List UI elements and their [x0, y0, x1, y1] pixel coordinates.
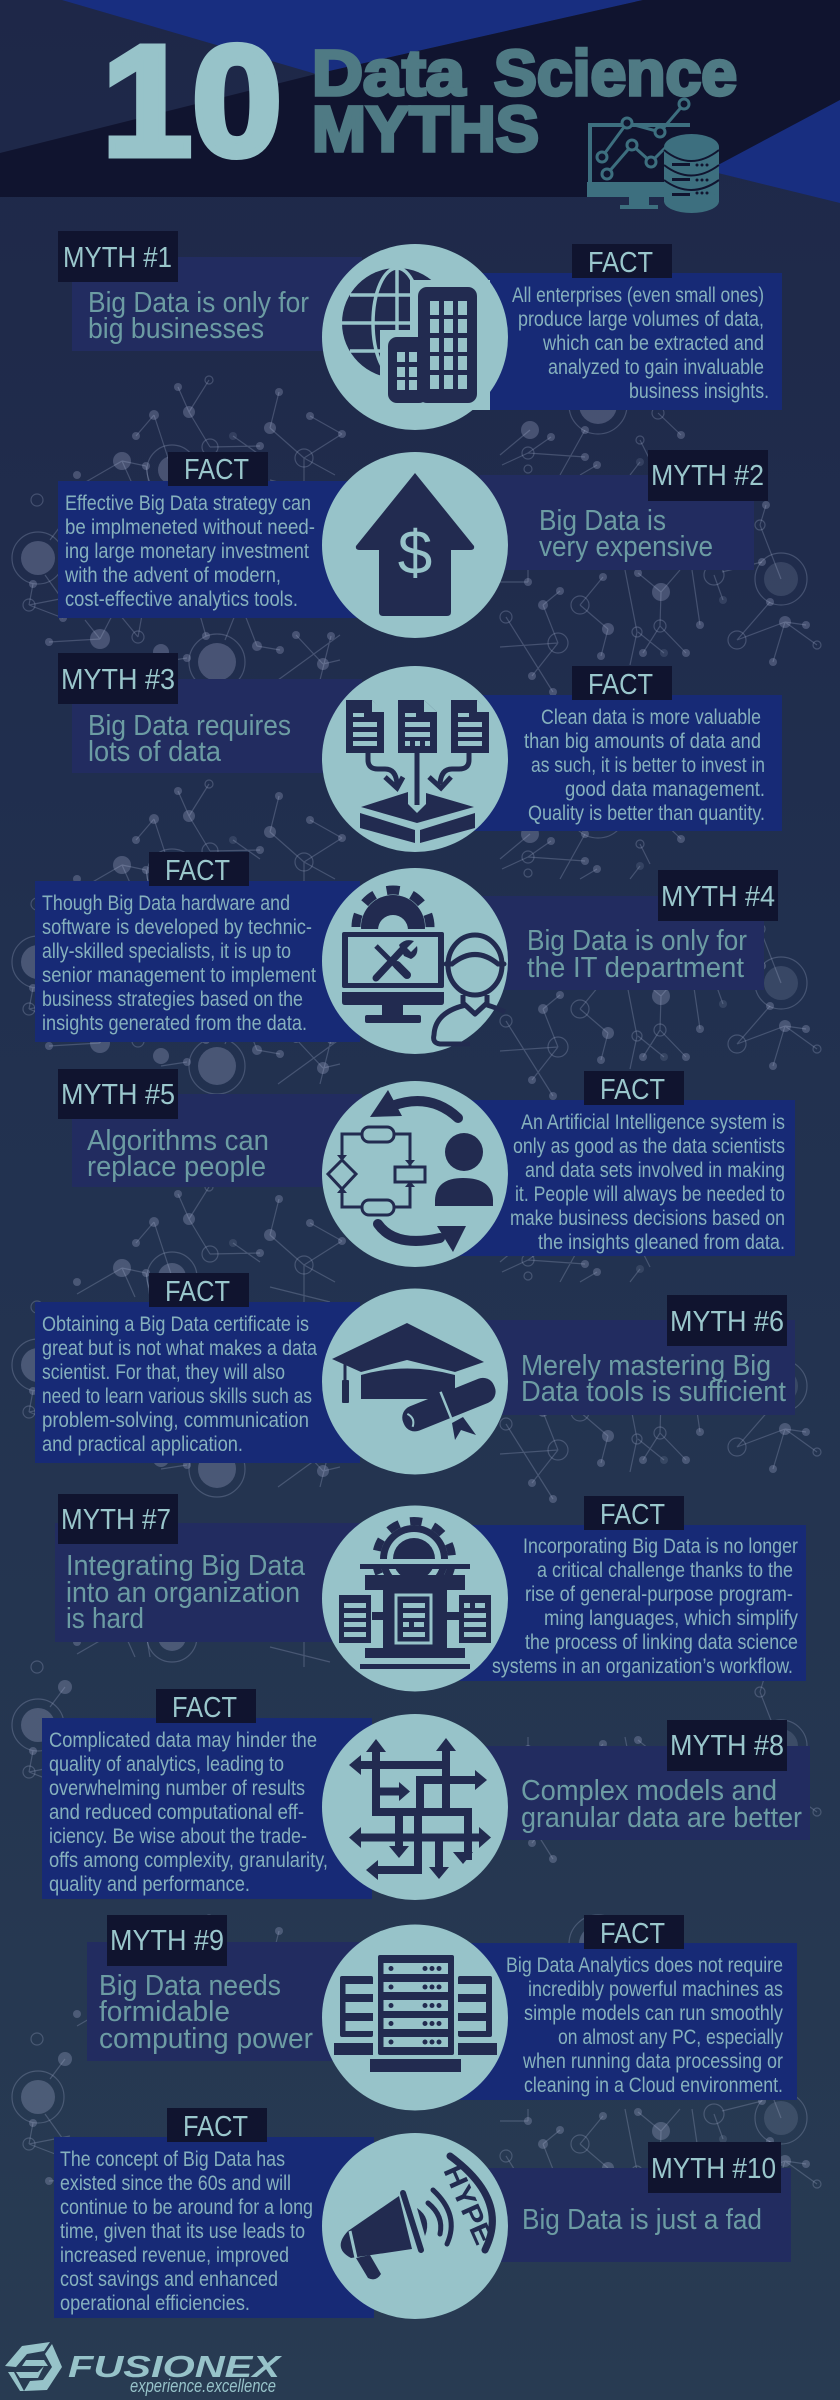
- circle 9: [322, 1924, 508, 2110]
- fact 4 panel: business strategies based on the: [42, 988, 303, 1011]
- fact 10 label: FACT: [183, 2111, 248, 2143]
- fact 9 panel: [460, 1943, 797, 2100]
- myth 2 panel: very expensive: [539, 531, 713, 563]
- icon: dollar arrow: [356, 473, 474, 616]
- myth 3 panel: [72, 679, 362, 773]
- myth 7 panel: is hard: [66, 1603, 144, 1635]
- header banner shapes: [0, 0, 840, 203]
- circle 2: [322, 452, 508, 638]
- background network pattern: [12, 376, 821, 2235]
- circle 4: [322, 868, 508, 1054]
- myth 7 label: MYTH #7: [61, 1504, 171, 1536]
- fact 1 panel: All enterprises (even small ones): [512, 284, 764, 307]
- fact 8 panel: and reduced computational eff-: [49, 1801, 304, 1824]
- myth 10 label: MYTH #10: [651, 2153, 776, 2185]
- icon: megaphone with HYPE: [341, 2156, 499, 2279]
- fact 8 panel: offs among complexity, granularity,: [49, 1849, 328, 1872]
- myth 7 panel: [55, 1523, 360, 1642]
- fact 2 panel: ing large monetary investment: [65, 540, 309, 563]
- fact 5 panel: make business decisions based on: [510, 1207, 785, 1230]
- myth 4 panel: the IT department: [527, 952, 744, 984]
- icon: globe and buildings: [342, 268, 490, 410]
- fact 4 label: [149, 852, 249, 887]
- logo: Fusionex: [5, 2342, 283, 2396]
- myth 8 label: MYTH #8: [670, 1730, 784, 1762]
- fact 9 panel: Big Data Analytics does not require: [506, 1954, 783, 1977]
- fact 9 panel: simple models can run smoothly: [524, 2002, 783, 2025]
- myth 9 panel: computing power: [99, 2023, 313, 2055]
- myth 8 label: [667, 1720, 787, 1771]
- myth 1 label: [58, 231, 178, 282]
- fact 2 panel: Effective Big Data strategy can: [65, 492, 311, 515]
- circle 8: [322, 1714, 508, 1900]
- fact 7 panel: a critical challenge thanks to the: [537, 1559, 793, 1582]
- fact 3 label: FACT: [588, 669, 653, 701]
- logo wordmark: FUSIONEX: [68, 2349, 283, 2384]
- fact 6 label: FACT: [165, 1276, 230, 1308]
- section: myth 5: [58, 1069, 795, 1267]
- fact 4 panel: insights generated from the data.: [42, 1012, 307, 1035]
- myth 9 panel: [87, 1942, 362, 2061]
- icon: gear, monitor and technician: [342, 890, 505, 1044]
- fact 8 panel: quality and performance.: [49, 1873, 250, 1896]
- fact 3 panel: Quality is better than quantity.: [528, 802, 765, 825]
- myth 2 panel: Big Data is: [539, 505, 666, 537]
- myth 10 panel: Big Data is just a fad: [522, 2204, 762, 2236]
- fact 6 panel: and practical application.: [42, 1433, 243, 1456]
- fact 6 panel: problem-solving, communication: [42, 1409, 309, 1432]
- circle 6: [322, 1288, 508, 1474]
- myth 6 panel: Merely mastering Big: [521, 1350, 771, 1382]
- fact 4 panel: ally-skilled specialists, it is up to: [42, 940, 291, 963]
- icon: monitor chart and database: [587, 99, 719, 213]
- logo tagline: experience.excellence: [130, 2376, 276, 2396]
- myth 1 label: MYTH #1: [63, 242, 172, 274]
- fact 2 label: [168, 452, 268, 486]
- fact 5 panel: An Artificial Intelligence system is: [521, 1111, 785, 1134]
- myth 3 label: MYTH #3: [61, 664, 175, 696]
- myth 7 panel: Integrating Big Data: [66, 1550, 306, 1582]
- fact 3 panel: good data management.: [565, 778, 765, 801]
- fact 6 panel: need to learn various skills such as: [42, 1385, 312, 1408]
- fact 9 panel: incredibly powerful machines as: [528, 1978, 783, 2001]
- fact 7 panel: [460, 1525, 806, 1681]
- icon: server racks: [334, 1955, 497, 2072]
- fact 10 panel: [54, 2137, 374, 2318]
- fact 7 label: FACT: [600, 1499, 665, 1531]
- fact 1 panel: [460, 273, 782, 410]
- myth 7 label: [58, 1494, 178, 1544]
- circle 5: [322, 1081, 508, 1267]
- section: myth 2: [58, 450, 768, 638]
- fact 1 panel: which can be extracted and: [542, 332, 764, 355]
- section: myth 10: [54, 2108, 791, 2319]
- myth 4 panel: Big Data is only for: [527, 925, 747, 957]
- fact 4 panel: software is developed by technic-: [42, 916, 312, 939]
- section: myth 1: [58, 231, 782, 430]
- myth 8 panel: [480, 1746, 810, 1840]
- myth 2 label: [648, 450, 768, 501]
- myth 8 panel: Complex models and: [521, 1775, 777, 1807]
- fact 1 label: [572, 244, 672, 279]
- fact 4 panel: senior management to implement: [42, 964, 316, 987]
- fact 7 panel: Incorporating Big Data is no longer: [523, 1535, 798, 1558]
- fact 4 panel: [35, 881, 360, 1042]
- myth 6 label: MYTH #6: [670, 1306, 784, 1338]
- fact 8 panel: iciency. Be wise about the trade-: [49, 1825, 307, 1848]
- fact 7 panel: rise of general-purpose program-: [525, 1583, 793, 1606]
- myth 10 label: [648, 2142, 781, 2193]
- myth 4 label: MYTH #4: [661, 881, 775, 913]
- fact 10 panel: existed since the 60s and will: [60, 2172, 291, 2195]
- fact 10 panel: time, given that its use leads to: [60, 2220, 305, 2243]
- fact 8 label: [156, 1689, 256, 1724]
- fact 8 panel: overwhelming number of results: [49, 1777, 305, 1800]
- fact 5 panel: [460, 1100, 795, 1256]
- title number 10: 10: [102, 14, 282, 189]
- fact 10 panel: cost savings and enhanced: [60, 2268, 278, 2291]
- icon: algorithm flow and person: [328, 1090, 493, 1252]
- myth 3 label: [58, 653, 178, 704]
- section: myth 3: [58, 653, 782, 852]
- fact 5 panel: only as good as the data scientists: [513, 1135, 785, 1158]
- fact 6 panel: [35, 1302, 360, 1463]
- section: myth 6: [35, 1273, 795, 1474]
- section: myth 9: [87, 1915, 797, 2110]
- fact 1 panel: business insights.: [629, 380, 769, 403]
- fact 9 label: [584, 1915, 684, 1950]
- fact 4 label: FACT: [165, 855, 230, 887]
- fact 3 panel: [460, 695, 782, 831]
- fact 1 panel: produce large volumes of data,: [518, 308, 764, 331]
- logo mark: [5, 2342, 62, 2391]
- section: myth 8: [42, 1689, 810, 1900]
- fact 10 panel: operational efficiencies.: [60, 2292, 250, 2315]
- section: myth 4: [35, 852, 778, 1054]
- fact 3 label: [572, 666, 672, 701]
- fact 7 panel: ming languages, which simplify: [544, 1607, 798, 1630]
- myth 10 panel: [480, 2168, 791, 2262]
- myth 9 label: [107, 1915, 227, 1966]
- myth 3 panel: lots of data: [88, 736, 222, 768]
- myth 5 panel: replace people: [87, 1151, 266, 1183]
- fact 6 panel: Obtaining a Big Data certificate is: [42, 1313, 309, 1336]
- fact 1 label: FACT: [588, 247, 653, 279]
- fact 3 panel: Clean data is more valuable: [541, 706, 761, 729]
- fact 6 panel: great but is not what makes a data: [42, 1337, 317, 1360]
- myth 9 panel: formidable: [99, 1996, 230, 2028]
- fact 1 panel: analyzed to gain invaluable: [548, 356, 764, 379]
- myth 6 panel: Data tools is sufficient: [521, 1376, 786, 1408]
- circle 7: [322, 1506, 508, 1692]
- myth 5 label: MYTH #5: [61, 1079, 175, 1111]
- circle 1: [322, 244, 508, 430]
- fact 6 panel: scientist. For that, they will also: [42, 1361, 285, 1384]
- myth 6 label: [667, 1295, 787, 1346]
- fact 9 panel: when running data processing or: [522, 2050, 783, 2073]
- fact 2 label: FACT: [184, 454, 249, 486]
- fact 2 panel: [58, 481, 358, 618]
- fact 5 panel: and data sets involved in making: [525, 1159, 785, 1182]
- fact 5 panel: the insights gleaned from data.: [538, 1231, 785, 1254]
- fact 9 label: FACT: [600, 1918, 665, 1950]
- icon: maze of arrows: [349, 1738, 491, 1880]
- fact 7 panel: the process of linking data science: [525, 1631, 798, 1654]
- icon: documents flowing into box: [346, 700, 490, 843]
- myth 5 panel: [72, 1094, 362, 1187]
- fact 3 panel: than big amounts of data and: [524, 730, 761, 753]
- title: [102, 14, 737, 189]
- icon: dollar arrow: $: [398, 519, 432, 588]
- myth 8 panel: granular data are better: [521, 1802, 802, 1834]
- fact 5 label: [584, 1071, 684, 1106]
- icon: megaphone with HYPE: HYPE: [438, 2160, 499, 2249]
- myth 3 panel: Big Data requires: [88, 710, 291, 742]
- myth 2 label: MYTH #2: [651, 460, 764, 492]
- myth 2 panel: [480, 475, 754, 570]
- fact 6 label: [149, 1273, 249, 1308]
- fact 2 panel: be implmeneted without need-: [65, 516, 315, 539]
- fact 8 panel: Complicated data may hinder the: [49, 1729, 317, 1752]
- circle 10: [322, 2133, 508, 2319]
- title line: MYTHS: MYTHS: [312, 93, 539, 165]
- myth 5 panel: Algorithms can: [87, 1125, 269, 1157]
- myth 7 panel: into an organization: [66, 1577, 300, 1609]
- fact 8 label: FACT: [172, 1692, 237, 1724]
- myth 9 panel: Big Data needs: [99, 1970, 281, 2002]
- fact 2 panel: cost-effective analytics tools.: [65, 588, 298, 611]
- fact 7 label: [584, 1496, 684, 1531]
- fact 5 label: FACT: [600, 1074, 665, 1106]
- section: myth 7: [55, 1494, 806, 1692]
- myth 6 panel: [480, 1320, 795, 1415]
- myth 1 panel: [72, 257, 362, 351]
- fact 3 panel: as such, it is better to invest in: [531, 754, 765, 777]
- fact 5 panel: it. People will always be needed to: [515, 1183, 785, 1206]
- title words: Data Science: Data: [312, 37, 465, 109]
- fact 8 panel: [42, 1718, 372, 1899]
- myth 4 label: [658, 870, 778, 921]
- icon: graduation cap and diploma: [332, 1323, 500, 1440]
- myth 1 panel: Big Data is only for: [88, 287, 309, 319]
- fact 10 panel: continue to be around for a long: [60, 2196, 313, 2219]
- myth 4 panel: [480, 896, 764, 990]
- fact 7 panel: systems in an organization’s workflow.: [492, 1655, 793, 1678]
- fact 9 panel: on almost any PC, especially: [558, 2026, 783, 2049]
- fact 2 panel: with the advent of modern,: [64, 564, 281, 587]
- myth 1 panel: big businesses: [88, 313, 264, 345]
- title words: Data Science: Science: [494, 37, 737, 109]
- icon: data centre temple with gear: [339, 1517, 491, 1669]
- fact 10 panel: The concept of Big Data has: [60, 2148, 285, 2171]
- fact 9 panel: cleaning in a Cloud environment.: [524, 2074, 783, 2097]
- title words: Data Science: [312, 37, 737, 109]
- myth 5 label: [58, 1069, 178, 1119]
- fact 8 panel: quality of analytics, leading to: [49, 1753, 284, 1776]
- fact 10 label: [167, 2108, 267, 2143]
- fact 4 panel: Though Big Data hardware and: [42, 892, 290, 915]
- fact 10 panel: increased revenue, improved: [60, 2244, 289, 2267]
- circle 3: [322, 666, 508, 852]
- myth 9 label: MYTH #9: [110, 1925, 224, 1957]
